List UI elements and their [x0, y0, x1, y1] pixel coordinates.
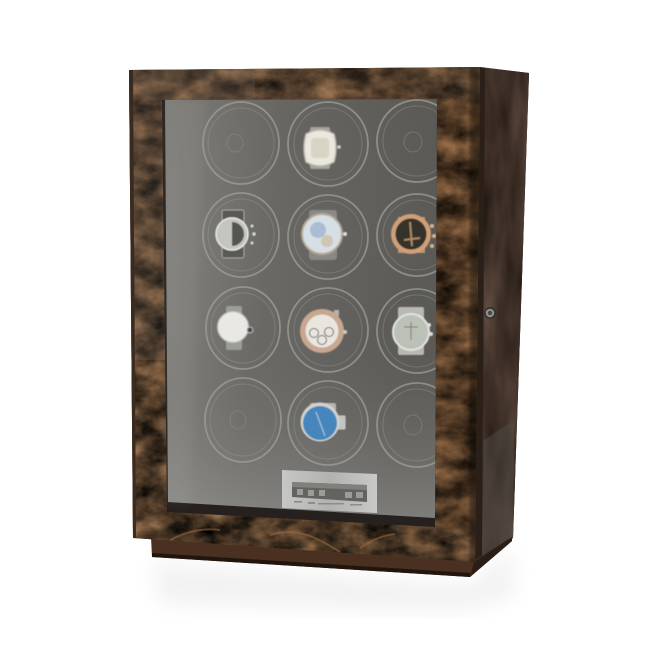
rotor row 4 column 2 — [288, 381, 368, 465]
rotor row 3 column 1 — [206, 287, 280, 369]
control labels — [294, 501, 362, 506]
product photo: burl wood watch winder cabinet — [129, 67, 529, 608]
LCD screen — [292, 482, 367, 502]
rotor row 1 column 3 — [376, 99, 437, 183]
cabinet plinth base — [151, 537, 512, 577]
brushed steel plate — [282, 470, 377, 513]
rotor row 4 column 3 — [376, 382, 436, 468]
watch: blue and white skeleton dial — [302, 210, 347, 260]
LCD control panel — [282, 470, 377, 513]
rotor row 1 column 2 — [288, 102, 368, 186]
side lock button — [485, 308, 495, 318]
glass reflection — [165, 100, 205, 503]
watch: rose gold — [391, 214, 436, 254]
cabinet side panel — [470, 67, 529, 577]
winder rotors grid — [203, 100, 457, 467]
rotor row 1 column 1 — [203, 102, 279, 184]
burl wood front frame — [125, 60, 485, 570]
watch: dark steel chronograph — [216, 210, 256, 258]
watch: blue dial diver — [300, 402, 346, 442]
rotor row 2 column 1 — [203, 193, 279, 277]
watch: silver bracelet — [393, 307, 433, 355]
rotor row 3 column 3 — [376, 288, 436, 374]
watch: rose bezel white chronograph — [300, 309, 347, 353]
rotor row 2 column 3 — [376, 193, 436, 277]
floor shadow — [152, 548, 514, 612]
watch: white round with crown — [218, 306, 253, 350]
rotor row 3 column 2 — [288, 288, 368, 372]
rotor row 2 column 2 — [288, 195, 368, 279]
glass door with dark gasket — [162, 99, 437, 527]
rotor row 4 column 1 — [205, 378, 281, 462]
watch: white tonneau — [304, 127, 341, 169]
